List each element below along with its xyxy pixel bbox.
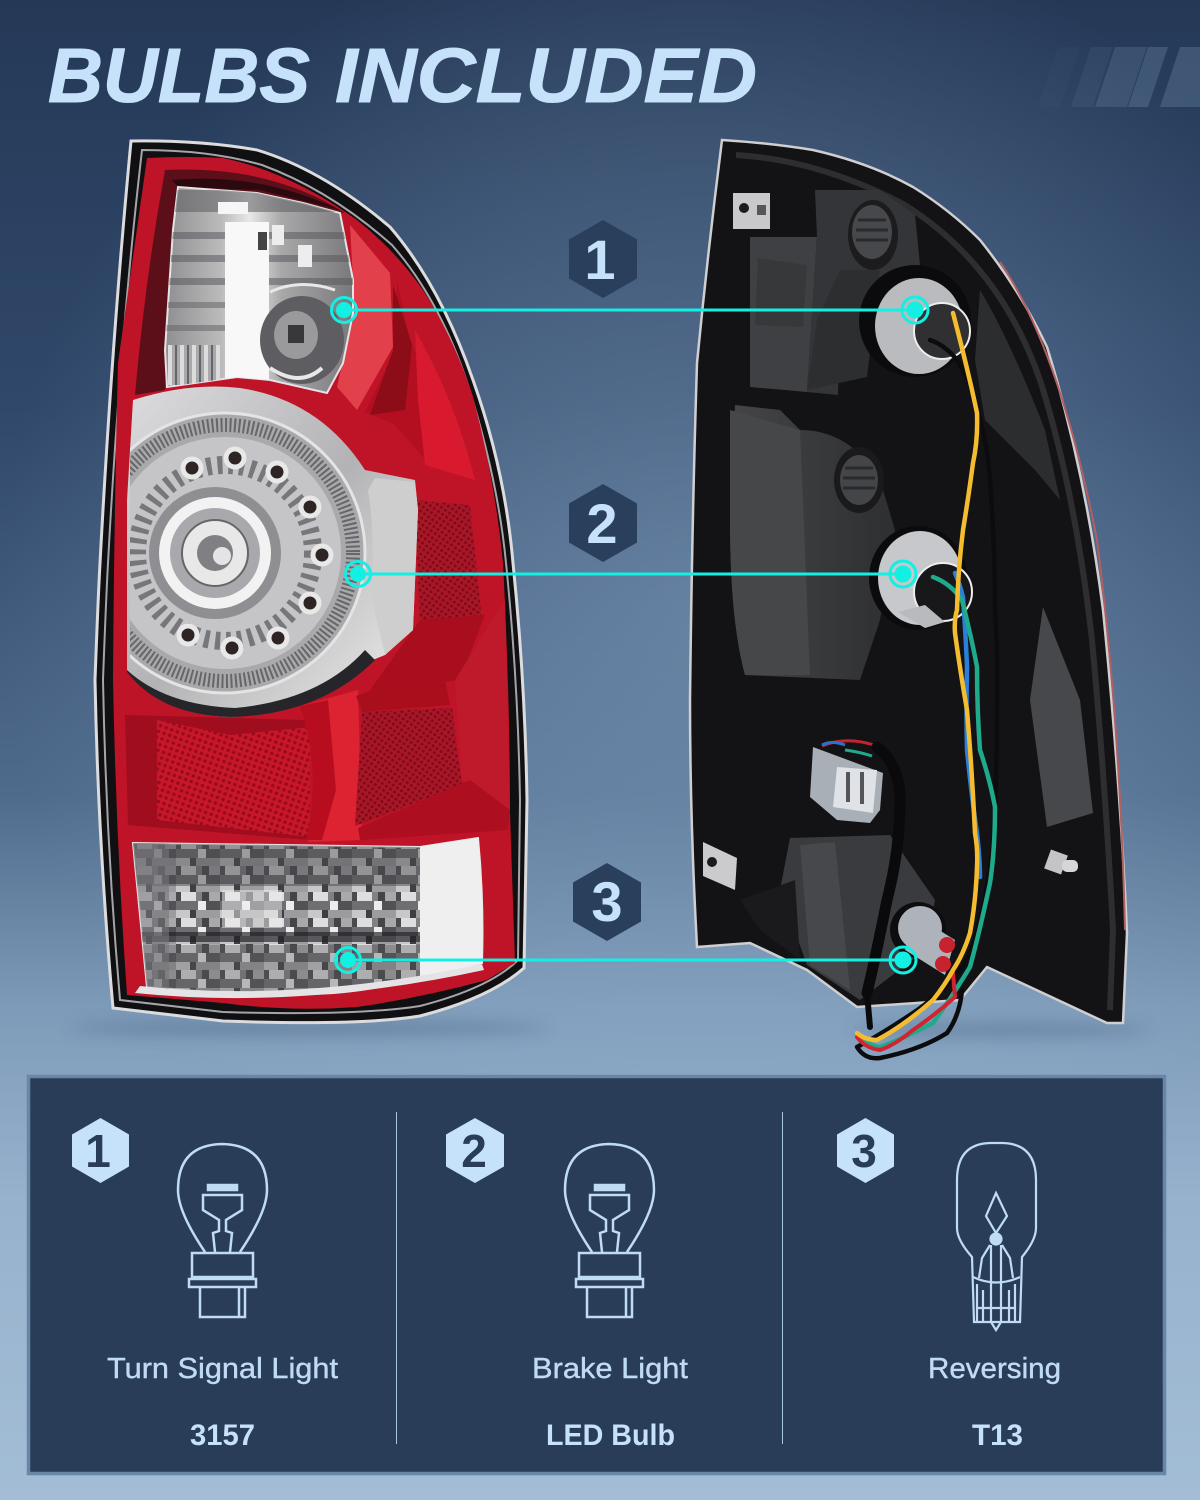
title: BULBS xyxy=(48,33,310,119)
icon: 3157 bulb xyxy=(178,1144,267,1317)
chrome inner line xyxy=(103,150,520,1013)
panel: bulb types xyxy=(28,1076,1164,1474)
electrical connector xyxy=(810,741,883,823)
lamp shadows xyxy=(70,1021,1150,1036)
callout 1 xyxy=(332,297,928,323)
title: INCLUDED xyxy=(335,33,757,119)
number badge 2: 2 xyxy=(586,492,618,555)
number badge 1: 1 xyxy=(584,228,616,291)
column 2: brake xyxy=(446,1118,688,1452)
badge 3: 3 xyxy=(851,1125,877,1177)
outer chrome and black frame xyxy=(95,141,527,1023)
middle gray panel xyxy=(730,405,895,680)
LED emitters xyxy=(179,449,331,657)
badge 2 xyxy=(446,1118,504,1183)
upper gray panel xyxy=(750,237,817,392)
lower clear lens xyxy=(130,835,484,998)
rear wall dark band xyxy=(736,155,1113,1010)
wiring harness xyxy=(857,313,997,1058)
badge 3 xyxy=(837,1118,894,1183)
badge 2: 2 xyxy=(461,1125,487,1177)
bulb type: LED bulb: LED Bulb xyxy=(546,1419,675,1452)
callout lines and markers xyxy=(332,297,928,973)
lower red reflectors xyxy=(125,500,510,842)
upper left dark maroon area xyxy=(135,170,345,395)
right tail light: rear view xyxy=(690,140,1127,1058)
center projector bulb xyxy=(149,487,281,619)
icon: LED bulb xyxy=(565,1144,654,1317)
upper bulb socket xyxy=(859,265,971,377)
badge 1: 1 xyxy=(85,1125,111,1177)
number badge 3: 3 xyxy=(591,870,623,933)
chrome circular housing xyxy=(127,386,418,717)
red edge highlight xyxy=(1000,262,1125,930)
lower bulb socket xyxy=(890,902,955,975)
LED lens xyxy=(130,412,366,694)
column 3: reversing xyxy=(837,1118,1061,1452)
label: turn signal light: Turn Signal Light xyxy=(107,1353,338,1385)
right gray panel xyxy=(975,290,1060,500)
bolt xyxy=(1044,850,1078,874)
left tail light: front view xyxy=(85,141,527,1023)
badge 1 xyxy=(72,1118,129,1183)
title xyxy=(48,33,757,119)
red body xyxy=(113,157,515,1009)
icon: T13 wedge bulb xyxy=(957,1143,1036,1330)
bulb type: 3157: 3157 xyxy=(190,1419,255,1452)
bulb type: T13: T13 xyxy=(972,1419,1023,1452)
decorative stripes top right xyxy=(1038,47,1200,107)
label: brake light: Brake Light xyxy=(532,1353,688,1385)
middle bulb socket xyxy=(869,526,972,630)
column 1: turn signal xyxy=(72,1118,338,1452)
housing xyxy=(690,140,1127,1023)
upper clear lens xyxy=(165,187,355,393)
callout 2 xyxy=(346,561,916,587)
callout 3 xyxy=(336,947,916,973)
label: reversing: Reversing xyxy=(928,1353,1061,1385)
rubber grommet middle xyxy=(834,447,884,513)
number badge 2 xyxy=(569,484,637,562)
bright red strip xyxy=(337,225,393,410)
bottom mounting clip xyxy=(703,842,737,890)
number badge 1 xyxy=(569,220,637,298)
lower bulb housing xyxy=(780,835,935,1000)
number badge 3 xyxy=(573,863,641,941)
top mounting clip xyxy=(733,193,770,229)
rubber grommet top xyxy=(848,200,898,270)
right dark red wedge xyxy=(365,280,470,470)
